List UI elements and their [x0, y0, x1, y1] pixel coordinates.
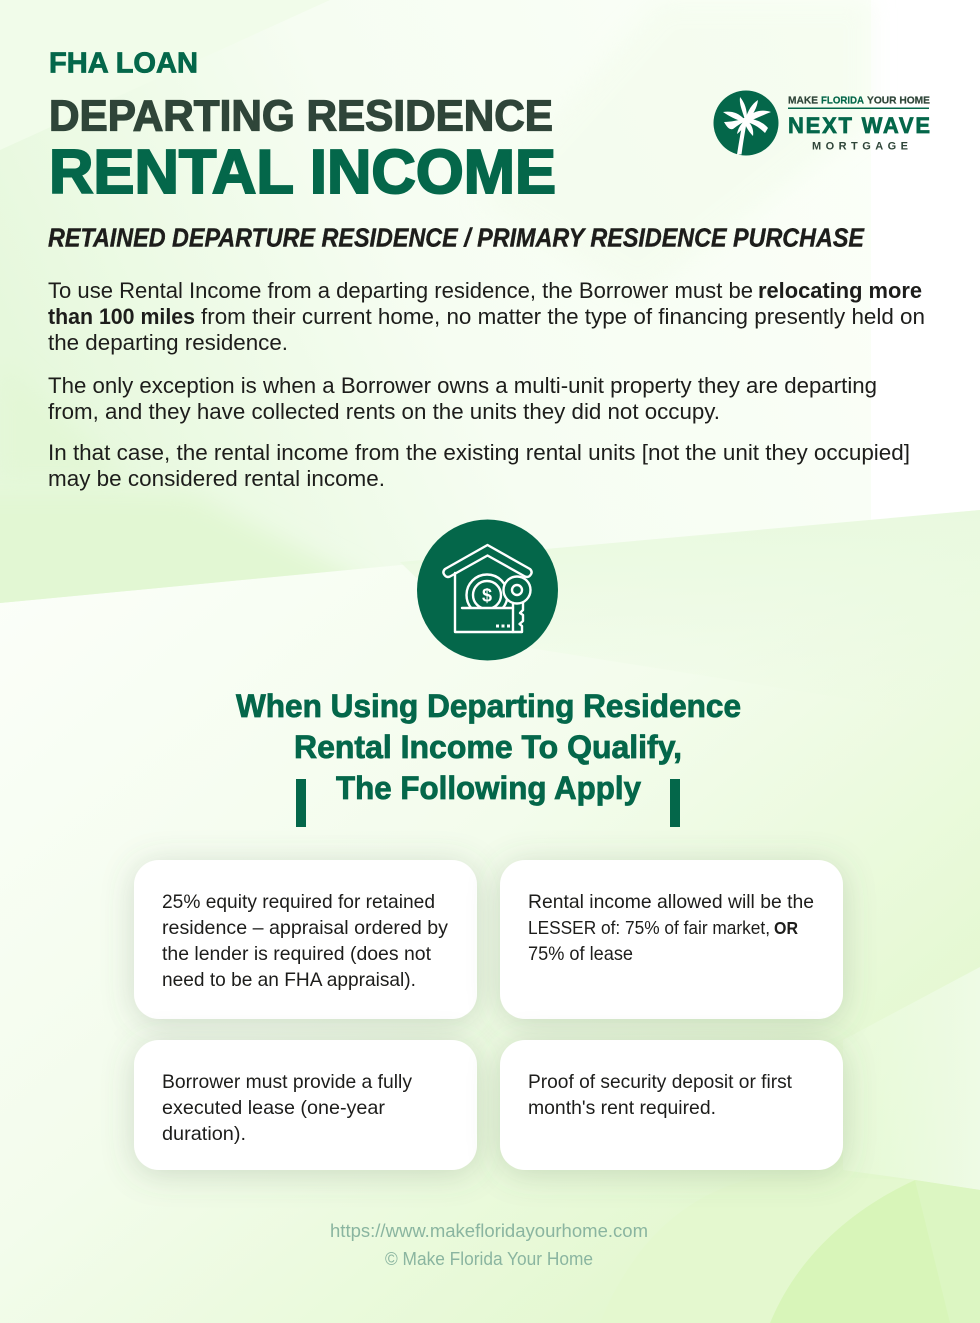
footer: © Make Florida Your Home [385, 1249, 593, 1269]
icon: house with coin and key [417, 520, 558, 660]
left accent bar [296, 779, 306, 827]
section heading: When Using Departing Residence [236, 688, 741, 724]
logo tagline [788, 96, 930, 106]
right accent bar [670, 779, 680, 827]
card: security deposit: Proof of security deposit or first [528, 1071, 793, 1093]
text block: case paragraph [48, 440, 910, 491]
text block: intro paragraph: from their current home, no matter the type of financing presently held on [201, 304, 925, 329]
card: equity: need to be an FHA appraisal). [162, 969, 416, 991]
footer [330, 1221, 648, 1269]
text block: intro paragraph: To use Rental Income from a departing residence, the Borrower must be [48, 278, 753, 303]
logo tagline: FLORIDA [821, 96, 864, 106]
card: equity [134, 860, 477, 1019]
card: lease [134, 1040, 477, 1170]
card: security deposit: month's rent required. [528, 1097, 716, 1119]
card: lease: Borrower must provide a fully [162, 1071, 412, 1093]
card: equity: residence – appraisal ordered by [162, 917, 448, 939]
icon: palm tree badge [714, 90, 778, 156]
icon: house with coin and key: $ [482, 586, 492, 606]
card: rental income allowed: OR [774, 918, 798, 938]
title: rental income: RENTAL INCOME [49, 138, 556, 207]
logo tagline: YOUR HOME [867, 96, 930, 106]
card: equity: the lender is required (does not [162, 943, 432, 965]
card: rental income allowed: Rental income allowed will be the [528, 891, 814, 913]
logo subline: MORTGAGE [812, 140, 908, 152]
text block: case paragraph: may be considered rental income. [48, 466, 385, 491]
section heading [236, 688, 741, 806]
text block: case paragraph: In that case, the rental income from the existing rental units [not the unit they occupied] [48, 440, 910, 465]
card: rental income allowed [500, 860, 843, 1019]
subtitle: RETAINED DEPARTURE RESIDENCE / PRIMARY RESIDENCE PURCHASE [48, 222, 865, 252]
card: lease: duration). [162, 1123, 246, 1145]
card: security deposit [500, 1040, 843, 1170]
footer: https://www.makefloridayourhome.com [330, 1221, 648, 1241]
text block: exception paragraph: from, and they have collected rents on the units they did not occupy. [48, 399, 720, 424]
title: departing residence: DEPARTING RESIDENCE [49, 92, 553, 140]
text block: exception paragraph [48, 373, 877, 424]
text block: intro paragraph: the departing residence. [48, 330, 288, 355]
card: rental income allowed: 75% of lease [528, 943, 633, 965]
logo: Next Wave Mortgage [714, 90, 930, 156]
text block: intro paragraph: relocating more [758, 278, 922, 303]
card: rental income allowed: LESSER of: 75% of fair market, [528, 917, 770, 938]
card: equity: 25% equity required for retained [162, 891, 435, 913]
text block: intro paragraph: than 100 miles [48, 304, 195, 329]
section heading: Rental Income To Qualify, [294, 729, 682, 765]
eyebrow: FHA LOAN: FHA LOAN [49, 48, 198, 80]
logo tagline: MAKE [788, 96, 818, 106]
text block: exception paragraph: The only exception is when a Borrower owns a multi-unit property they are departing [48, 373, 877, 398]
card: lease: executed lease (one-year [162, 1097, 386, 1119]
logo wordmark: NEXT WAVE [788, 113, 930, 138]
section heading: The Following Apply [336, 770, 641, 806]
text block: intro paragraph [48, 278, 925, 355]
